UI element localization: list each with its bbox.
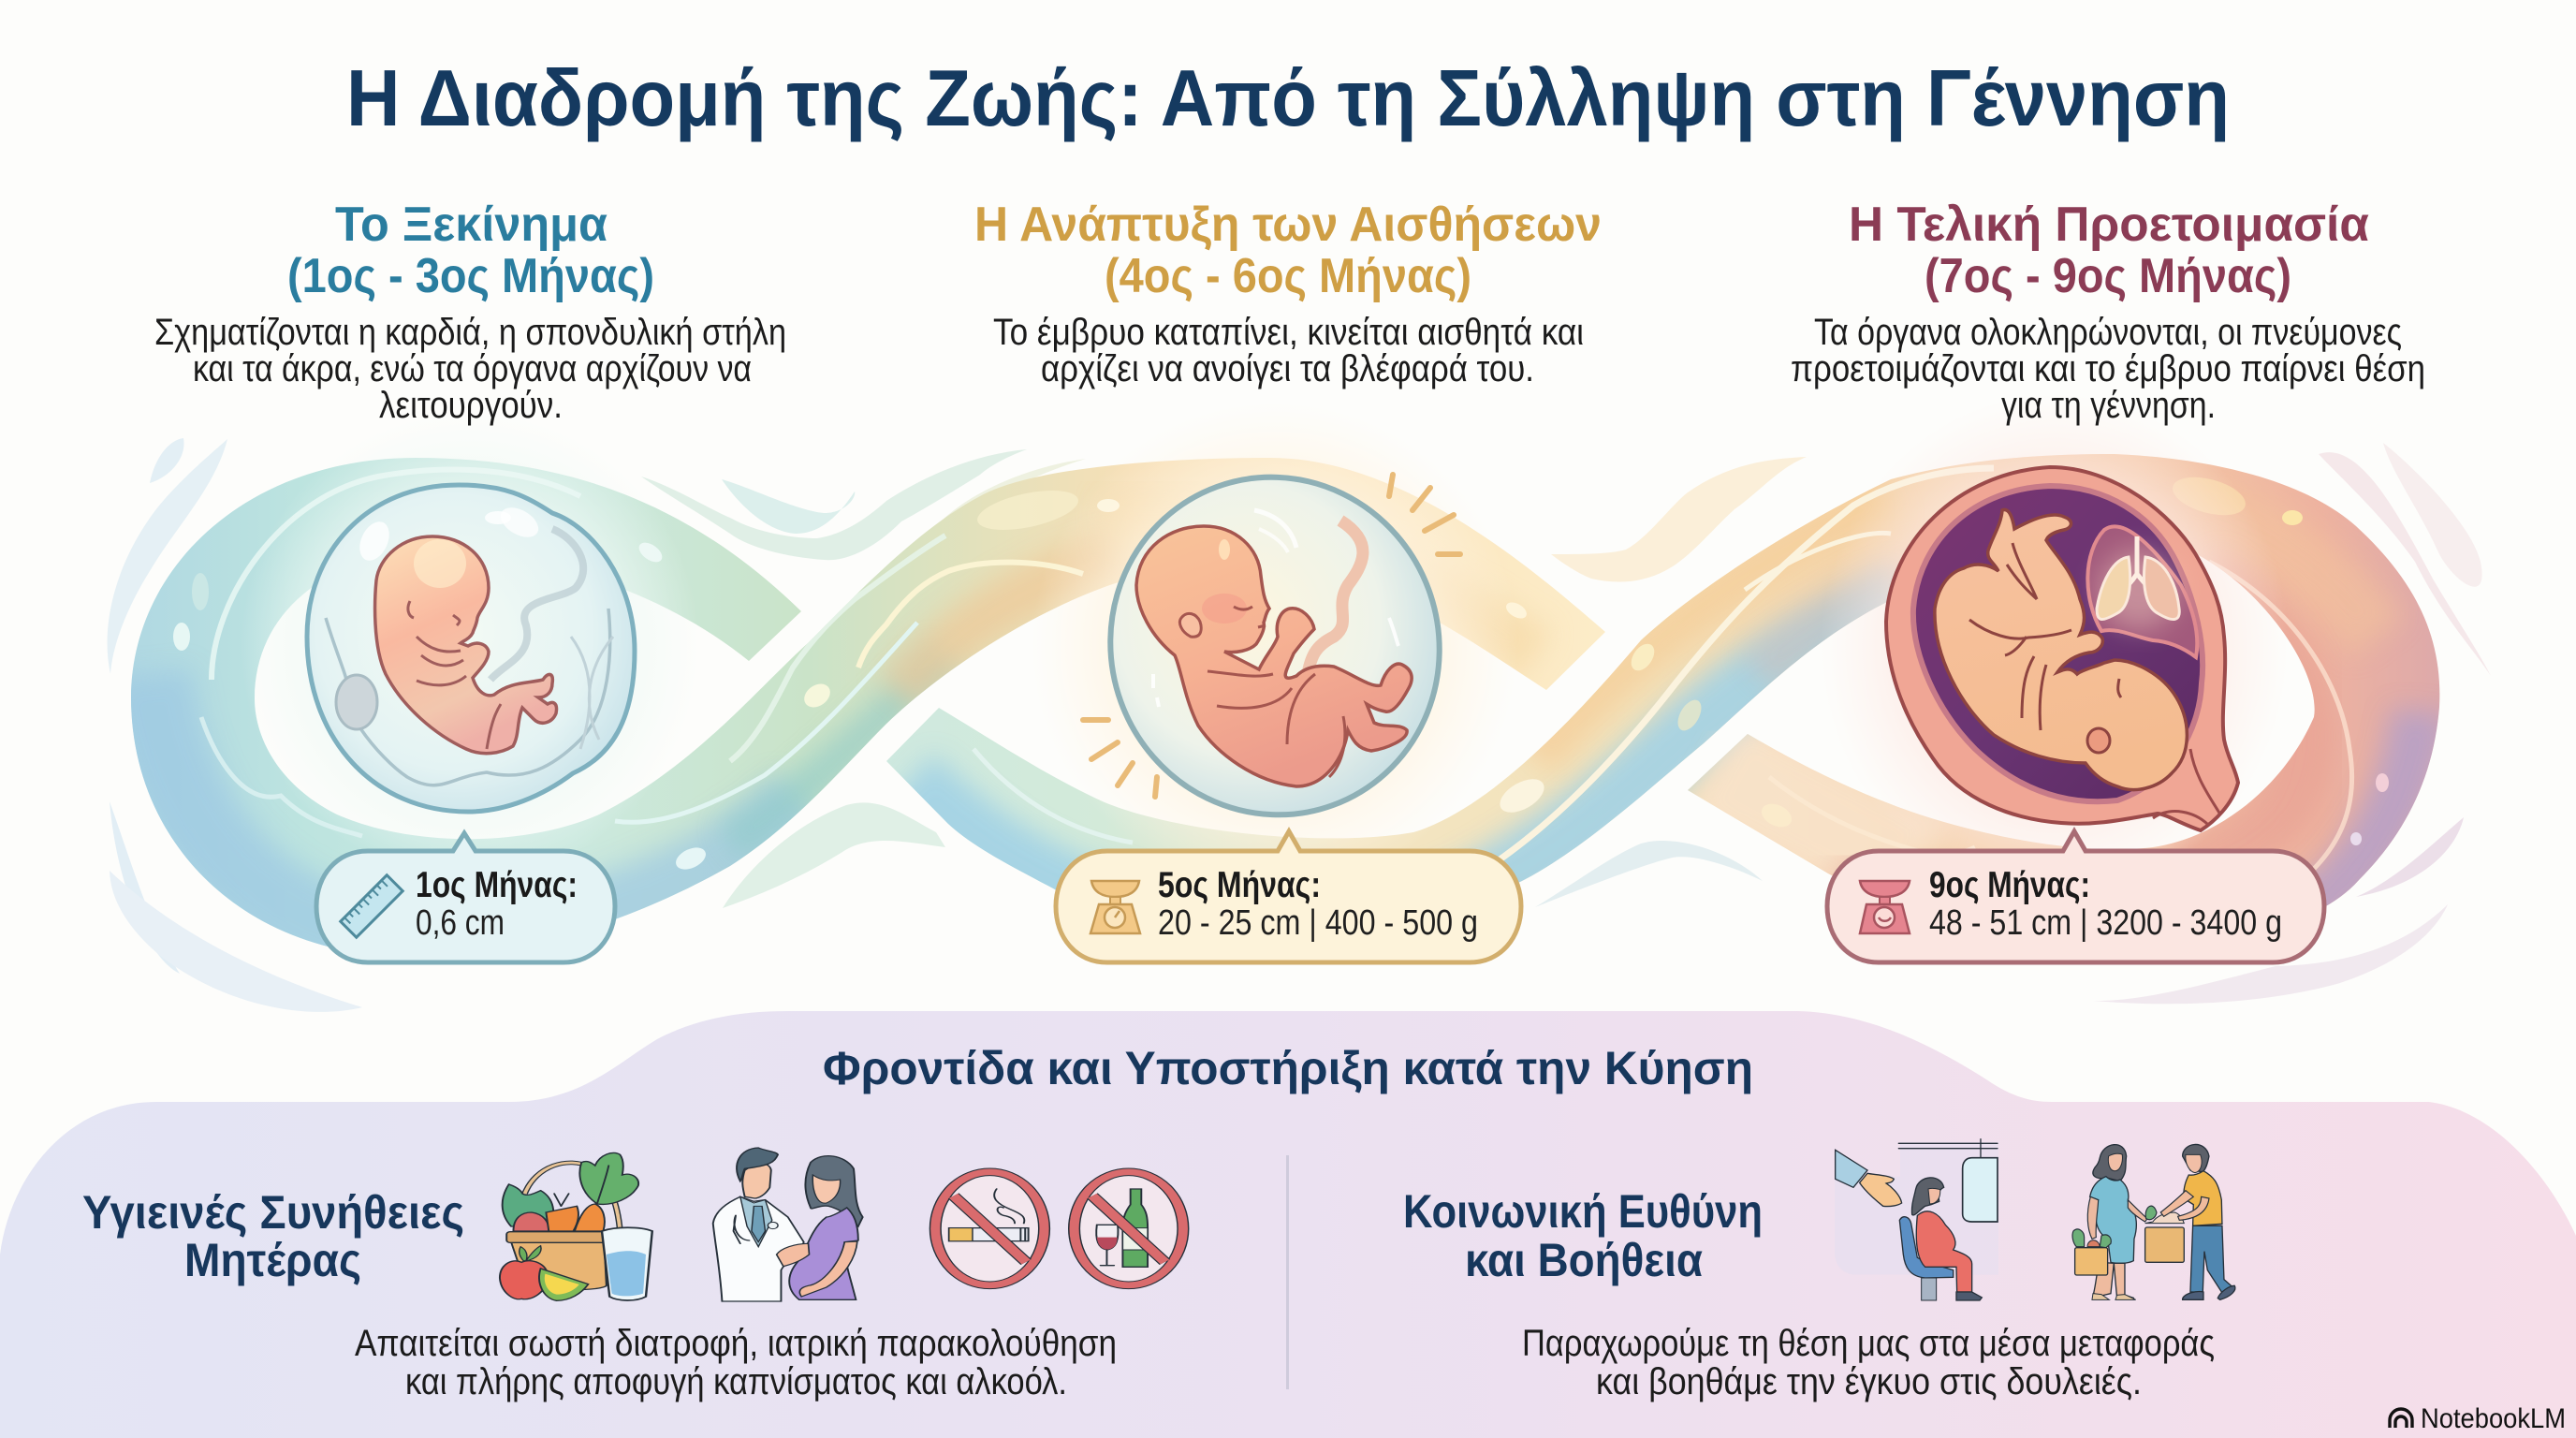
callout: month 1: 1ος Μήνας:: [416, 865, 578, 905]
stage heading: second trimester: (4ος - 6ος Μήνας): [1105, 249, 1471, 303]
callout: month 9: [1827, 831, 2324, 962]
stage heading: third trimester: Η Τελική Προετοιμασία: [1849, 198, 2369, 252]
heading: social responsibility: και Βοήθεια: [1465, 1234, 1703, 1286]
yolk sac: [336, 675, 377, 729]
stage heading: third trimester: [1849, 198, 2369, 303]
icon: ruler: [341, 875, 402, 937]
heading: social responsibility: [1403, 1185, 1763, 1286]
fetus body, legs and head: [1935, 509, 2187, 790]
stage heading: third trimester: (7ος - 9ος Μήνας): [1925, 249, 2291, 303]
stage text: first trimester: [154, 312, 786, 426]
bubble: first trimester embryo: [307, 485, 635, 812]
stage heading: first trimester: Το Ξεκίνημα: [335, 198, 607, 252]
panel heading: Φροντίδα και Υποστήριξη κατά την Κύηση: [823, 1042, 1753, 1094]
text: social responsibility: [1522, 1323, 2215, 1402]
stage text: second trimester: αρχίζει να ανοίγει τα βλέφαρά του.: [1041, 348, 1534, 389]
heading: healthy habits: Μητέρας: [184, 1234, 361, 1286]
heading: healthy habits: Υγιεινές Συνήθειες: [82, 1186, 464, 1239]
bubble: second trimester fetus: [1063, 431, 1486, 861]
icon: helping with shopping bags: [2072, 1144, 2235, 1299]
soft glow behind stage two: [1032, 403, 1518, 889]
text: social responsibility: Παραχωρούμε τη θέση μας στα μέσα μεταφοράς: [1522, 1323, 2215, 1364]
icon: no smoking: [929, 1168, 1049, 1289]
soft glow behind stage three: [1821, 393, 2289, 899]
callout: month 1: [316, 833, 615, 962]
icon: doctor with pregnant woman: [713, 1148, 863, 1301]
text: healthy habits: Απαιτείται σωστή διατροφή, ιατρική παρακολούθηση: [355, 1323, 1117, 1364]
icon: no alcohol: [1069, 1168, 1189, 1289]
upper wall pocket with lungs: [2087, 526, 2197, 657]
icon: kitchen scale: [1090, 881, 1140, 933]
stage text: second trimester: [993, 312, 1584, 389]
callout: month 9: 9ος Μήνας:: [1929, 865, 2090, 905]
umbilical cord: [490, 529, 583, 680]
decorative wisps: [108, 438, 2491, 1012]
callout: month 5: [1056, 831, 1521, 962]
stage text: third trimester: Τα όργανα ολοκληρώνονται, οι πνεύμονες: [1814, 312, 2402, 353]
ribbon: second strand from lower crossing to rose loop: [886, 454, 2439, 906]
soft glow behind stage one: [241, 412, 699, 880]
stage text: first trimester: λειτουργούν.: [379, 385, 563, 426]
callout: month 5: 20 - 25 cm | 400 - 500 g: [1158, 903, 1478, 943]
stage text: third trimester: [1791, 312, 2425, 426]
panel: care and support: [0, 1011, 2576, 1438]
sparkle lines around second bubble: [1083, 475, 1460, 797]
icon: giving up a seat on transit: [1835, 1139, 1998, 1300]
logo: NotebookLM: NotebookLM: [2421, 1403, 2566, 1434]
umbilical cord: [1306, 521, 1363, 683]
callout: month 9: 48 - 51 cm | 3200 - 3400 g: [1929, 903, 2282, 943]
callout: month 1: 0,6 cm: [416, 903, 505, 943]
stage text: third trimester: προετοιμάζονται και το έμβρυο παίρνει θέση: [1791, 348, 2425, 389]
stage heading: second trimester: Η Ανάπτυξη των Αισθήσεων: [974, 198, 1602, 252]
text: healthy habits: [355, 1323, 1117, 1402]
callout: month 5: 5ος Μήνας:: [1158, 865, 1321, 905]
fetus body: [1136, 526, 1412, 786]
divider: [1286, 1155, 1289, 1389]
stage heading: first trimester: [287, 198, 654, 303]
title: Η Διαδρομή της Ζωής: Από τη Σύλληψη στη Γέννηση: [346, 54, 2230, 143]
stage text: second trimester: Το έμβρυο καταπίνει, κινείται αισθητά και: [993, 312, 1584, 353]
icon: food basket and water: [500, 1152, 652, 1300]
womb: third trimester fetus: [1886, 467, 2238, 830]
stage heading: first trimester: (1ος - 3ος Μήνας): [287, 249, 654, 303]
heading: social responsibility: Κοινωνική Ευθύνη: [1403, 1185, 1763, 1238]
stage text: third trimester: για τη γέννηση.: [2001, 385, 2216, 426]
ribbon: first strand from teal loop to golden crest: [131, 458, 1605, 947]
icon: lungs: [2097, 536, 2179, 629]
icon: baby scale: [1860, 881, 1910, 933]
text: social responsibility: και βοηθάμε την έγκυο στις δουλειές.: [1596, 1361, 2142, 1402]
embryo body: [375, 536, 557, 754]
heading: healthy habits: [82, 1186, 464, 1286]
stage heading: second trimester: [974, 198, 1602, 303]
stage text: first trimester: Σχηματίζονται η καρδιά, η σπονδυλική στήλη: [154, 312, 786, 353]
text: healthy habits: και πλήρης αποφυγή καπνίσματος και αλκοόλ.: [405, 1361, 1067, 1402]
stage text: first trimester: και τα άκρα, ενώ τα όργανα αρχίζουν να: [193, 348, 752, 389]
